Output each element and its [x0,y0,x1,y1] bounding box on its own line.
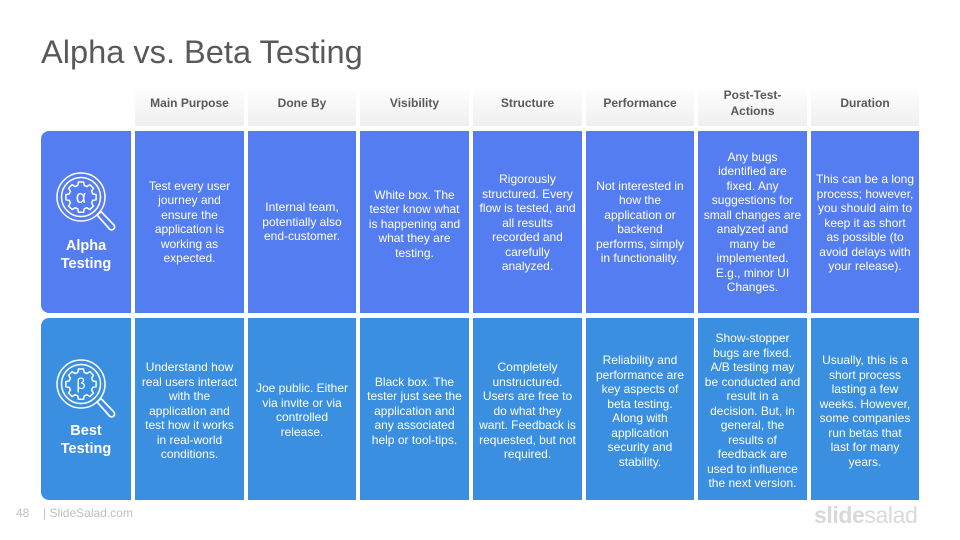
cell: beta post-test actions: results of [728,433,777,447]
icon: magnifier with gear and beta: β [76,376,86,393]
cell: alpha structure [473,131,582,313]
cell: alpha post-test actions: Changes. [727,280,778,294]
cell: beta duration [811,318,919,500]
cell: alpha performance [586,131,694,313]
cell: alpha main purpose: Test every user [149,178,230,192]
footer: page number: 48 [16,506,29,520]
column header: Post-Test-Actions: Actions [730,104,774,118]
heading: Best Testing [60,423,111,457]
cell: alpha done by: Internal team, [265,200,339,214]
column header: Done By: Done By [278,96,326,110]
cell: beta duration: Usually, this is a [822,353,908,367]
cell: alpha performance: application or [604,208,676,222]
cell: beta post-test actions: general, the [721,418,784,432]
cell: beta structure: Completely [497,360,558,374]
cell: alpha visibility: White box. The [374,188,455,202]
cell: beta structure: do what they [493,404,562,418]
cell: beta structure: required. [504,447,551,461]
cell: beta post-test actions: A/B testing may [710,360,795,374]
cell: alpha duration: avoid delays with [819,245,911,259]
cell: beta structure [473,318,582,500]
cell: beta performance: security and [608,440,672,454]
cell: beta performance: Along with [612,411,668,425]
cell: beta duration: some companies [820,411,910,425]
cell: beta structure: requested, but not [479,433,576,447]
cell: alpha structure: carefully [505,245,550,259]
cell: beta performance [586,318,694,500]
column header: Post-Test-Actions: Post-Test- [724,88,781,102]
cell: alpha structure: recorded and [492,230,563,244]
cell: alpha visibility: tester know what [369,202,460,216]
cell: beta performance: stability. [619,454,661,468]
column header: Structure: Structure [501,96,554,110]
panel: best testing label [41,318,131,500]
cell: beta performance: key aspects of [602,382,678,396]
column header: Post-Test-Actions [698,86,807,126]
cell: beta post-test actions: result in a [726,389,778,403]
cell: alpha post-test actions: small changes are [704,208,801,222]
cell: beta post-test actions: feedback are [718,447,787,461]
cell: beta performance: Reliability and [603,353,677,367]
cell: beta duration: last for many [831,440,899,454]
cell: beta structure: unstructured. [492,375,563,389]
cell: alpha main purpose: working as [161,236,218,250]
cell: beta visibility: Black box. The [375,375,454,389]
logo: slidesalad: slidesalad [814,502,917,528]
title: Alpha vs. Beta Testing [41,33,363,70]
cell: alpha main purpose: application is [155,222,224,236]
cell: alpha duration: process; however, [817,187,913,201]
cell: beta performance: performance are [596,368,684,382]
cell: alpha structure: analyzed. [502,259,553,273]
cell: alpha visibility: is happening and [369,217,460,231]
cell: beta duration: short process [829,368,901,382]
cell: beta visibility: any associated [374,418,455,432]
column header: Main Purpose [135,86,244,126]
cell: alpha structure: Rigorously [499,172,556,186]
cell: beta post-test actions [698,318,807,500]
cell: alpha duration: you should aim to [818,201,912,215]
cell: alpha done by: end-customer. [264,229,340,243]
cell: beta done by: via invite or via [262,396,342,410]
column header: Visibility [360,86,469,126]
cell: alpha performance: backend [617,222,663,236]
column header: Done By [248,86,356,126]
column header: Structure [473,86,582,126]
cell: beta done by: release. [281,424,323,438]
cell: beta done by: Joe public. Either [256,381,348,395]
heading: Alpha Testing: Testing [61,256,111,272]
cell: alpha post-test actions: fixed. Any [726,178,778,192]
heading: Alpha Testing [60,238,111,272]
heading: Alpha Testing: Alpha [66,238,106,254]
column header: Duration: Duration [840,96,890,110]
cell: alpha post-test actions: suggestions for [712,193,793,207]
cell: alpha post-test actions: Any bugs [727,150,778,164]
icon: magnifier with gear and alpha: α [76,187,86,207]
cell: beta duration: run betas that [828,426,902,440]
cell: alpha done by [248,131,356,313]
cell: beta post-test actions: the next version. [708,476,797,490]
column header: Visibility: Visibility [390,96,439,110]
cell: beta duration: lasting a few [832,382,898,396]
cell: alpha duration: your release). [828,259,902,273]
icon: magnifier with gear and alpha [56,172,116,231]
cell: alpha duration: as possible (to [826,230,904,244]
cell: alpha visibility: testing. [395,246,434,260]
cell: beta post-test actions: be conducted and [705,375,800,389]
cell: beta post-test actions: used to influence [707,462,798,476]
cell: beta post-test actions: decision. But, in [710,404,795,418]
cell: alpha post-test actions: analyzed and [717,222,788,236]
cell: alpha structure: structured. Every [482,187,573,201]
icon: magnifier with gear and beta [56,359,116,418]
cell: beta main purpose [135,318,244,500]
cell: beta duration: weeks. However, [820,396,910,410]
cell: alpha performance: Not interested in [596,178,684,192]
cell: beta main purpose: application and [149,404,230,418]
cell: alpha structure: flow is tested, and [479,201,576,215]
cell: beta structure: Users are free to [483,389,572,403]
heading: Best Testing: Best [70,423,102,439]
column header: Performance [586,86,694,126]
cell: beta done by: controlled [276,410,328,424]
cell: alpha post-test actions: E.g., minor UI [716,266,789,280]
cell: beta structure: want. Feedback is [479,418,576,432]
cell: alpha duration: This can be a long [816,172,914,186]
cell: beta main purpose: in real-world [157,433,222,447]
cell: beta main purpose: real users interact [142,375,237,389]
panel: alpha testing label [41,131,131,313]
cell: beta main purpose: with the [169,389,210,403]
cell: beta main purpose: test how it works [145,418,234,432]
cell: beta main purpose: conditions. [161,447,218,461]
cell: alpha performance: performs, simply [596,236,684,250]
cell: alpha structure: all results [502,216,553,230]
cell: alpha main purpose: journey and [158,193,221,207]
heading: Best Testing: Testing [61,441,111,457]
cell: alpha main purpose [135,131,244,313]
cell: beta main purpose: Understand how [146,360,233,374]
cell: beta post-test actions: Show-stopper [715,331,790,345]
cell: alpha performance: in functionality. [601,251,679,265]
cell: alpha visibility: what they are [378,231,451,245]
cell: beta post-test actions: bugs are fixed. [713,346,792,360]
cell: alpha post-test actions: implemented. [716,251,789,265]
cell: alpha duration [811,131,919,313]
cell: alpha post-test actions: identified are [718,164,787,178]
cell: alpha visibility [360,131,469,313]
cell: beta visibility: application and [374,404,455,418]
cell: alpha duration: keep it as short [824,216,906,230]
footer: source: | SlideSalad.com [43,506,133,520]
cell: alpha post-test actions: many be [729,236,776,250]
cell: beta visibility [360,318,469,500]
cell: alpha main purpose: expected. [163,251,216,265]
cell: alpha done by: potentially also [262,215,342,229]
column header: Main Purpose: Main Purpose [150,96,229,110]
cell: beta performance: beta testing. [607,396,673,410]
cell: beta visibility: help or tool-tips. [372,433,457,447]
cell: alpha performance: how the [619,193,661,207]
column header: Duration [811,86,919,126]
cell: beta duration: years. [849,454,881,468]
cell: beta visibility: tester just see the [367,389,462,403]
column header: Performance: Performance [603,96,677,110]
cell: beta performance: application [611,426,669,440]
cell: beta done by [248,318,356,500]
cell: alpha post-test actions [698,131,807,313]
cell: alpha main purpose: ensure the [161,208,218,222]
